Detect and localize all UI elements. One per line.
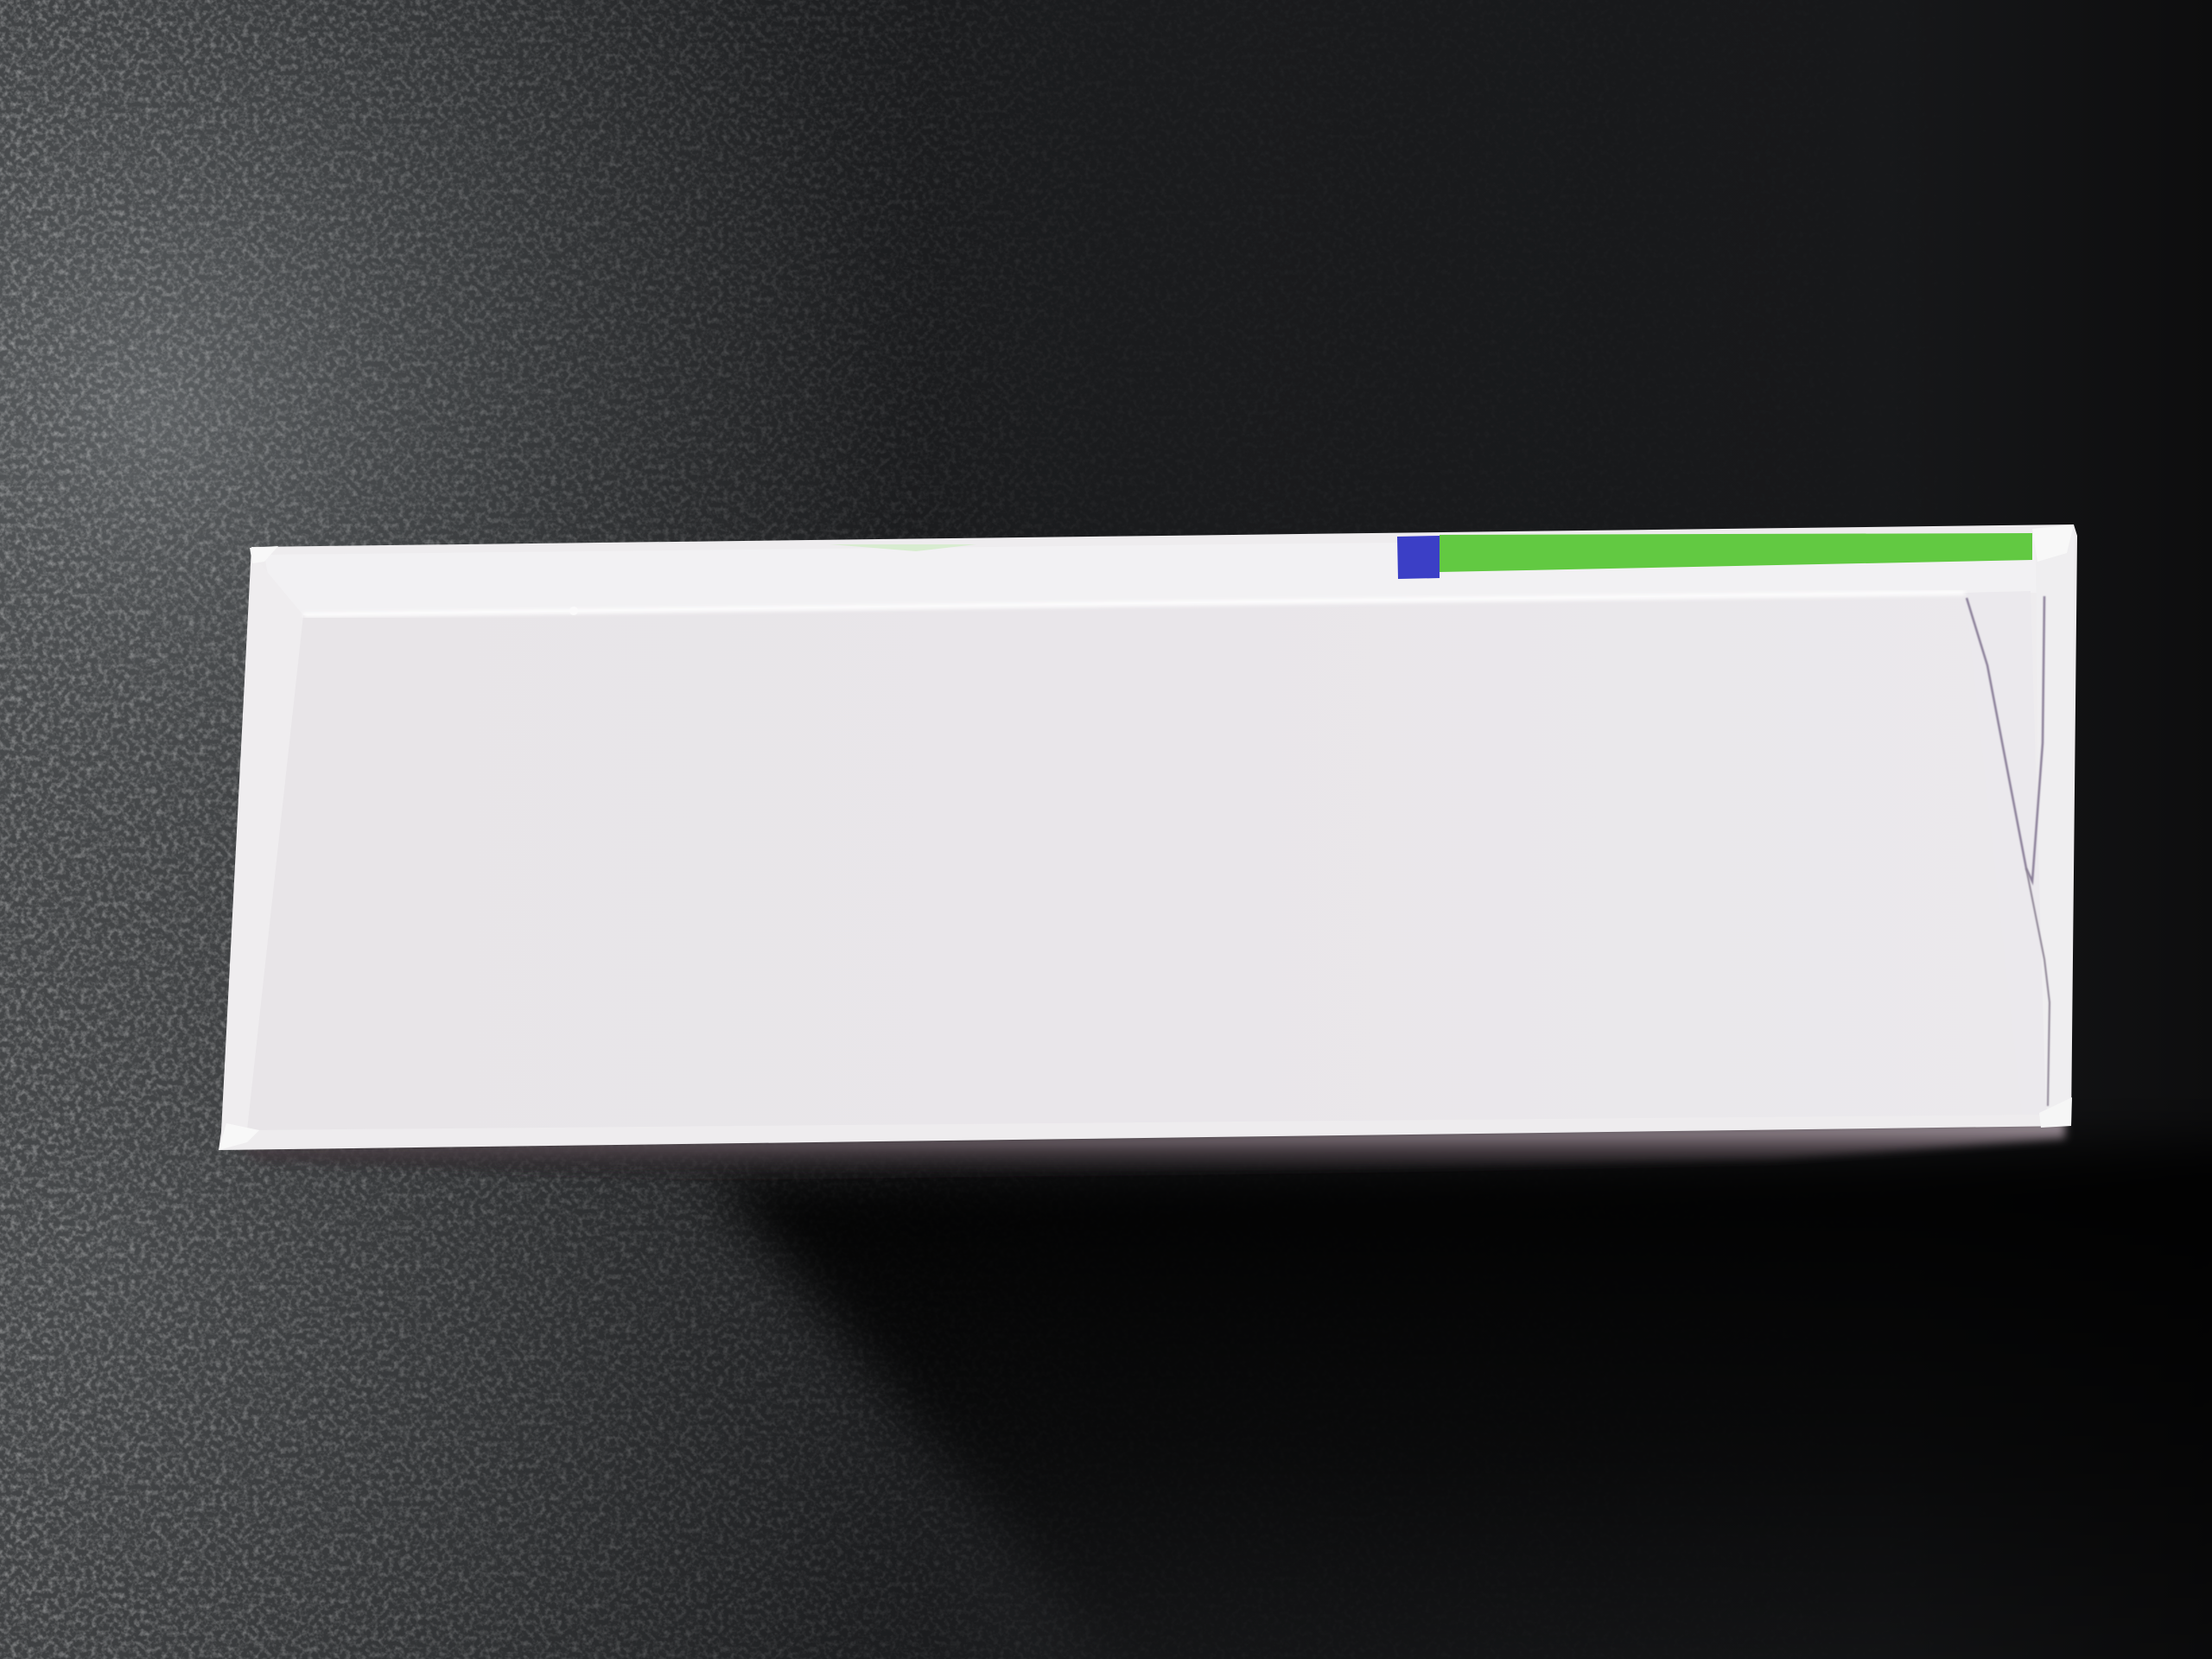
bottom right corner fold xyxy=(2039,1097,2072,1128)
top right corner fold xyxy=(2032,524,2074,562)
left flap edge xyxy=(221,553,303,1142)
thin crease line on the right flap xyxy=(1967,596,2044,881)
bottom left corner fold xyxy=(219,1123,259,1150)
blue printed block xyxy=(1397,536,1440,579)
green printed stripe xyxy=(1440,533,2032,572)
underside edge of the box xyxy=(238,1122,2065,1180)
right face extension xyxy=(1965,591,2046,1115)
box: white carton xyxy=(219,524,2077,1180)
top fold strip xyxy=(264,536,2039,615)
outer carton outline xyxy=(219,524,2077,1150)
main face panel xyxy=(247,593,2048,1130)
lower crease line on the right flap xyxy=(2026,868,2050,1106)
shadow: cast by the box onto the surface xyxy=(709,1141,2212,1659)
pale green trace near top left xyxy=(830,544,976,551)
top left corner fold xyxy=(250,546,278,563)
fold highlight under the strip xyxy=(303,593,1965,615)
small nick at the top fold xyxy=(569,607,578,615)
right flap edge xyxy=(2036,529,2074,1123)
